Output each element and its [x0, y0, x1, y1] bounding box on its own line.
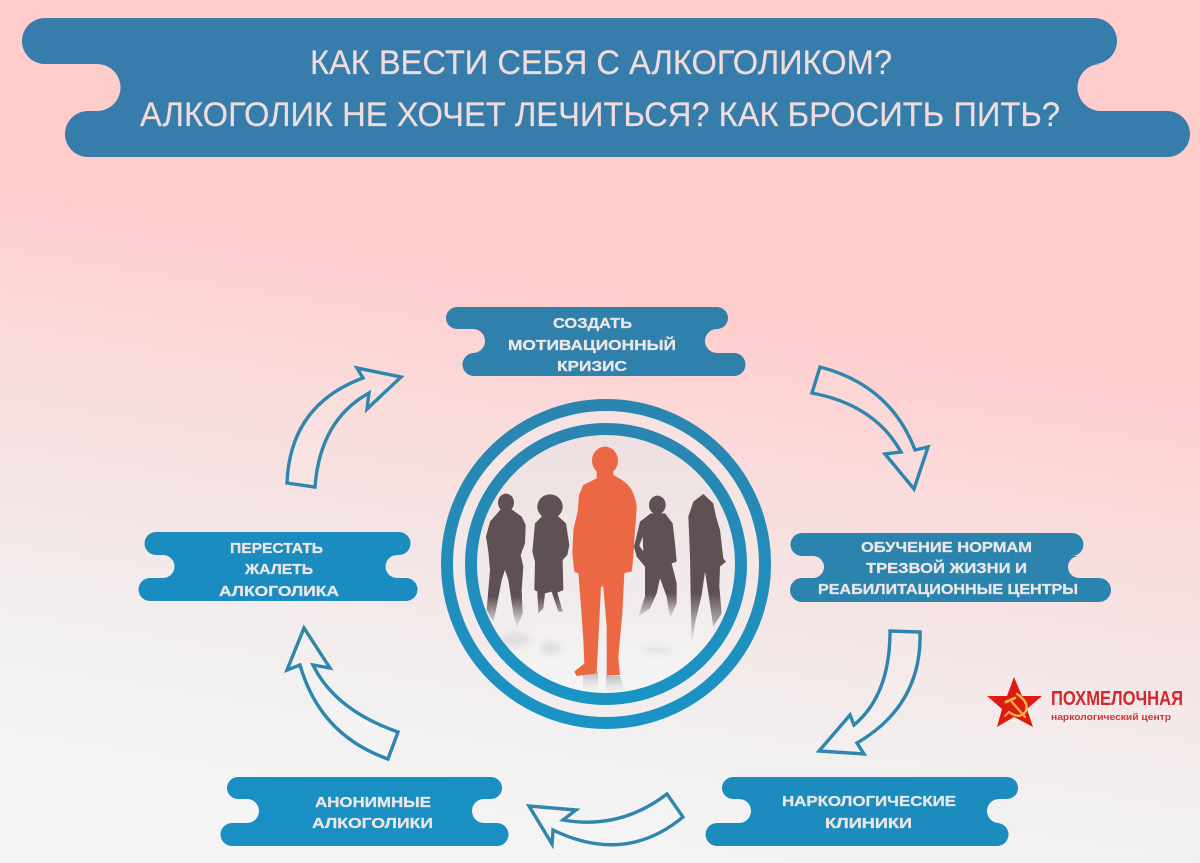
step: narcological clinics: НАРКОЛОГИЧЕСКИЕ: [782, 793, 956, 810]
step: create motivational crisis: СОЗДАТЬ: [553, 315, 632, 332]
arrow: top to right: [812, 367, 928, 489]
grey person 4: [688, 494, 726, 643]
outer ring: [447, 405, 765, 723]
arrow: bottom left to left: [287, 628, 398, 759]
step: create motivational crisis: МОТИВАЦИОННЫЙ: [508, 336, 676, 354]
arrow: right to bottom right: [819, 631, 920, 754]
step: create motivational crisis: КРИЗИС: [557, 358, 627, 375]
step: narcological clinics: КЛИНИКИ: [825, 815, 912, 832]
step: sobriety training and rehab centres: РЕАБИЛИТАЦИОННЫЕ ЦЕНТРЫ: [818, 581, 1078, 598]
step: sobriety training and rehab centres: [790, 533, 1111, 602]
step: stop pitying the alcoholic: АЛКОГОЛИКА: [219, 583, 339, 600]
people group: [486, 447, 726, 692]
arrow: left to top: [287, 368, 401, 487]
step: narcological clinics: [706, 777, 1018, 846]
step: sobriety training and rehab centres: ОБУЧЕНИЕ НОРМАМ: [861, 539, 1032, 556]
grey person 2: [532, 494, 569, 613]
step: stop pitying the alcoholic: [139, 532, 418, 601]
step: alcoholics anonymous: [221, 777, 509, 846]
icon: red star with hammer and sickle: [987, 677, 1042, 727]
step: create motivational crisis: [446, 307, 746, 376]
logo: Pokhmelochnaya: [987, 677, 1183, 727]
arrow: bottom right to bottom left: [529, 794, 683, 845]
grey person 3: [634, 496, 677, 618]
title line 1: КАК ВЕСТИ СЕБЯ С АЛКОГОЛИКОМ?: [310, 44, 892, 82]
central circle with people: [447, 405, 765, 723]
step: stop pitying the alcoholic: ЖАЛЕТЬ: [244, 561, 313, 578]
grey person 1: [486, 494, 526, 628]
title banner: [22, 18, 1190, 157]
inner ring: [471, 429, 741, 699]
faded floor reflections: [500, 632, 671, 655]
logo subtitle: наркологический центр: [1051, 712, 1172, 722]
step: alcoholics anonymous: АНОНИМНЫЕ: [315, 794, 431, 811]
title line 2: АЛКОГОЛИК НЕ ХОЧЕТ ЛЕЧИТЬСЯ? КАК БРОСИТЬ ПИТЬ?: [140, 96, 1060, 134]
step: stop pitying the alcoholic: ПЕРЕСТАТЬ: [230, 540, 323, 557]
step: alcoholics anonymous: АЛКОГОЛИКИ: [312, 815, 433, 832]
central orange person: [572, 447, 637, 676]
foot reflections of central person: [583, 672, 625, 692]
step: sobriety training and rehab centres: ТРЕЗВОЙ ЖИЗНИ И: [866, 559, 1027, 577]
